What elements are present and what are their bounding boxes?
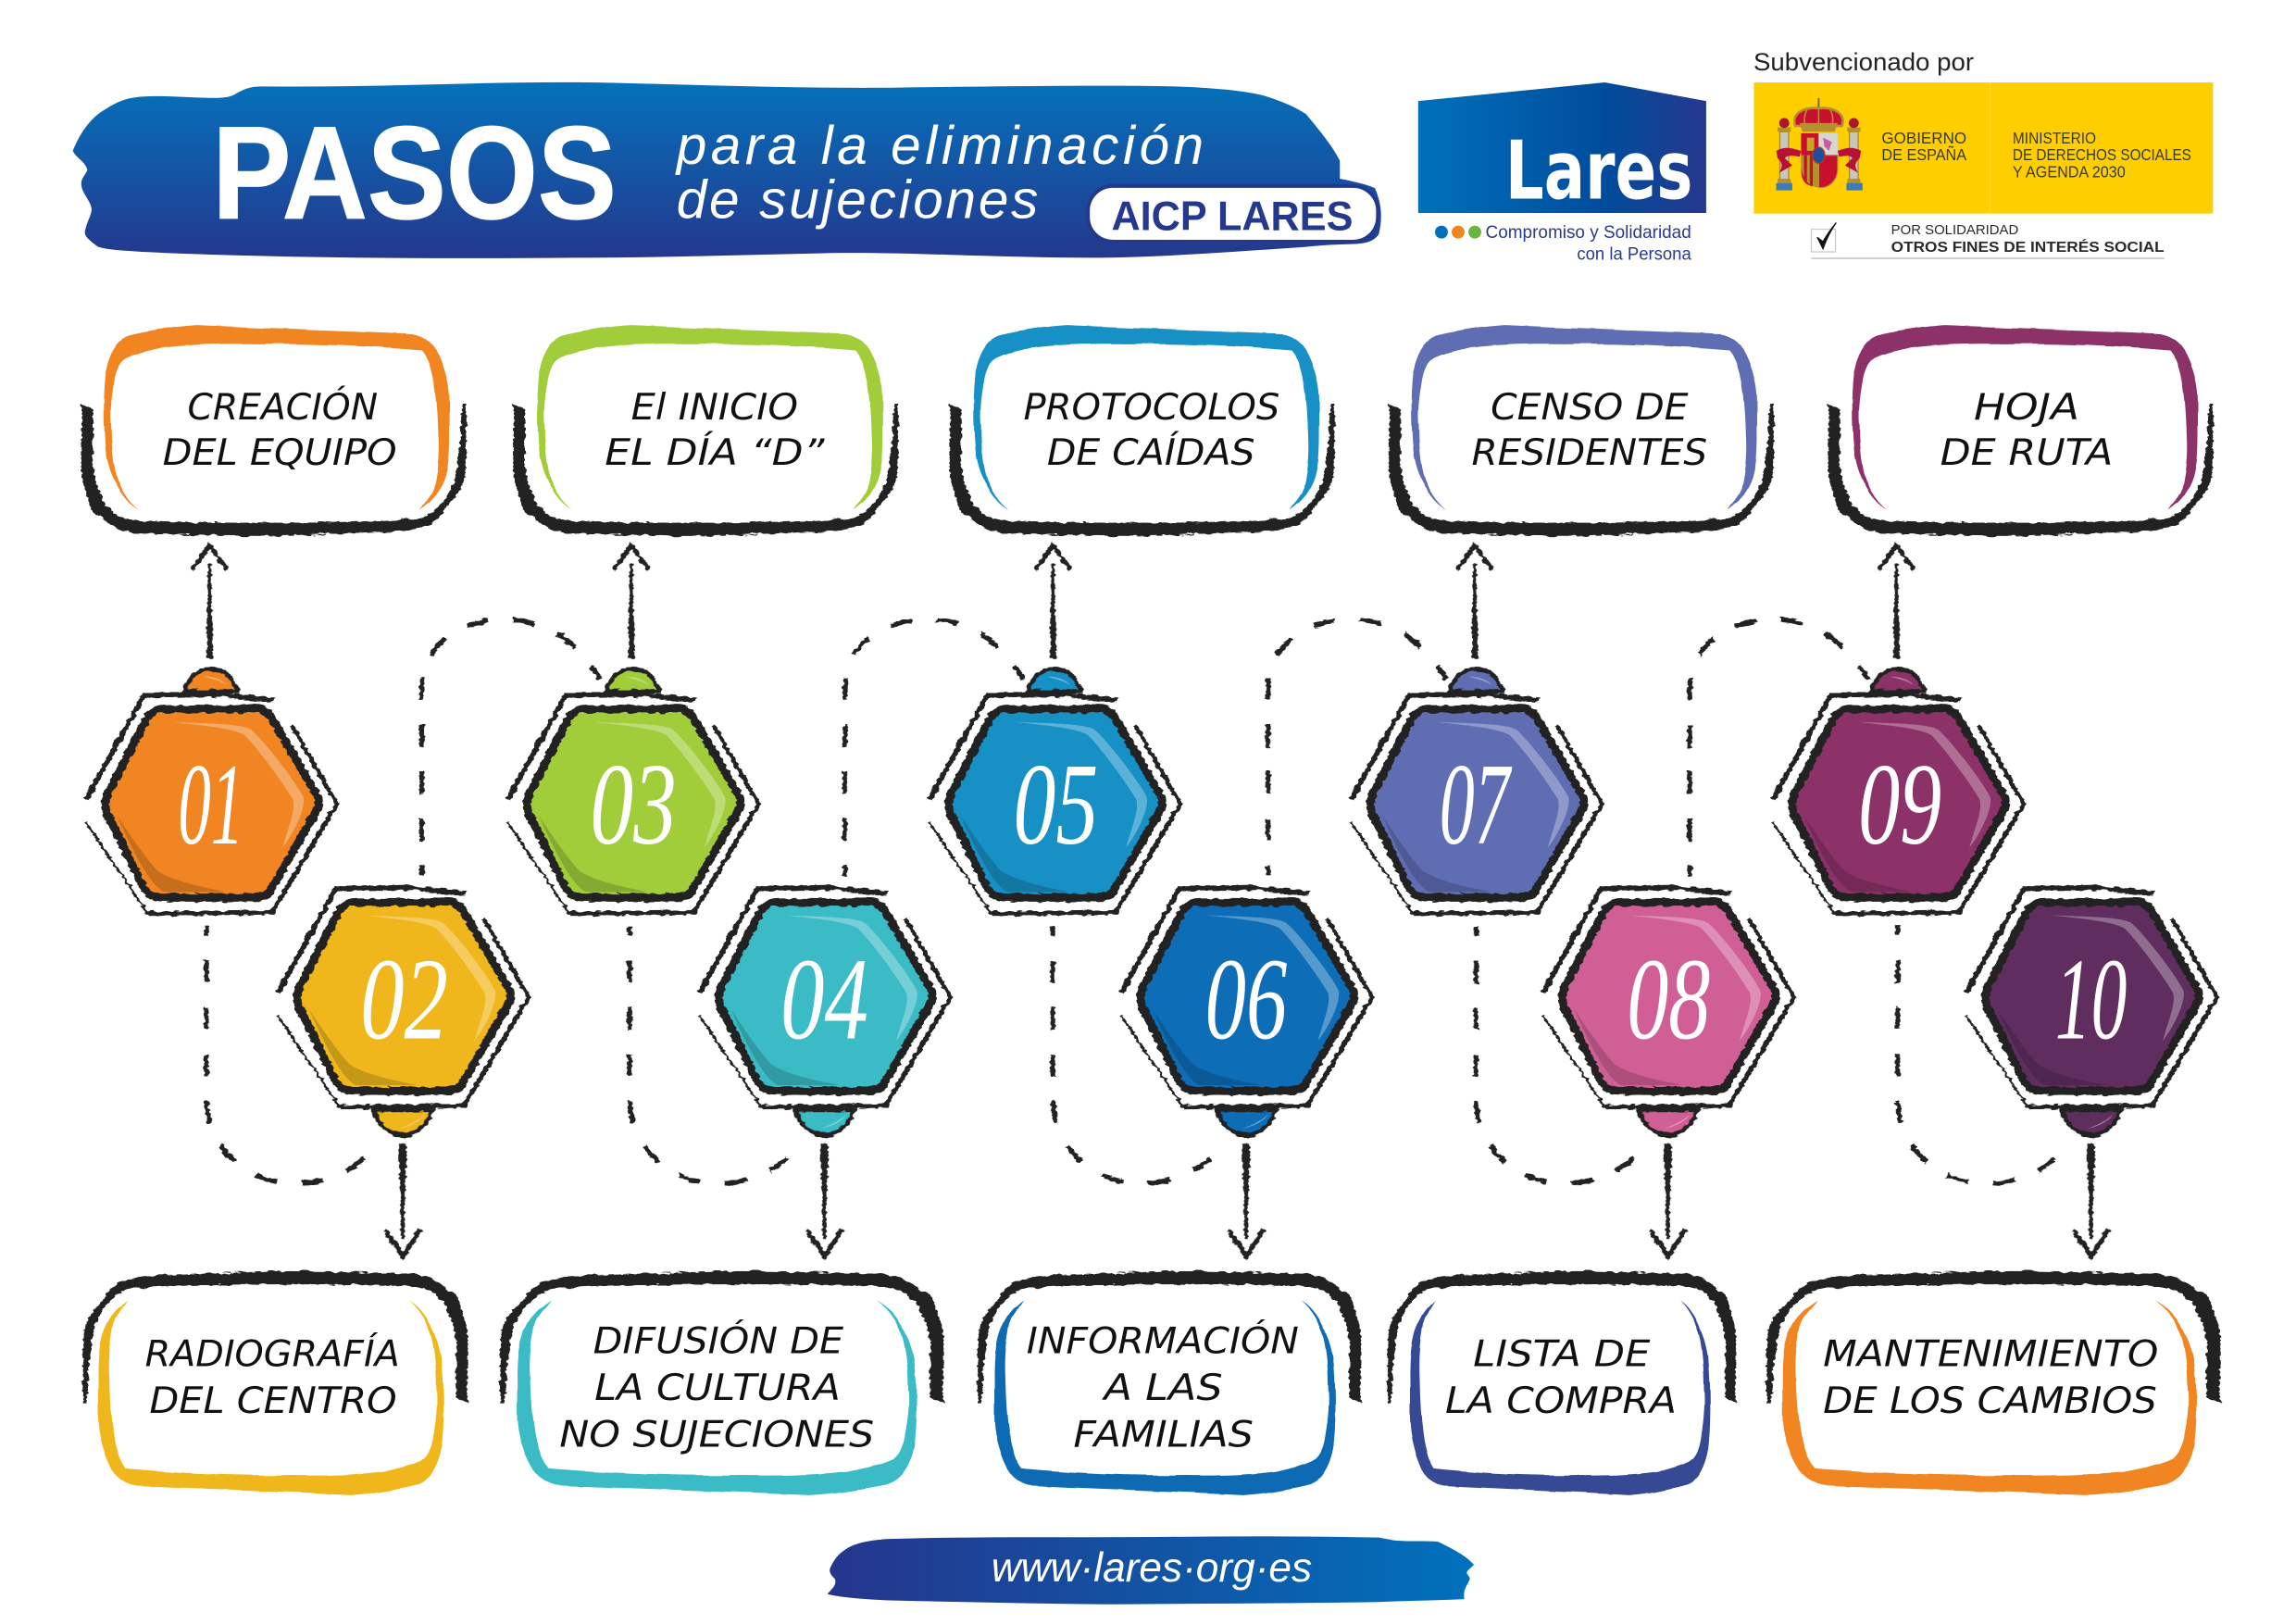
hexagon 07 bbox=[1352, 669, 1602, 914]
government yellow band bbox=[1753, 82, 2213, 214]
hexagon 10: 10 bbox=[2055, 934, 2127, 1064]
arrow up 05 bbox=[1034, 542, 1072, 659]
hexagon 08: 08 bbox=[1627, 934, 1710, 1064]
hexagon 01 bbox=[86, 669, 337, 914]
step box: mantenimiento bbox=[1766, 1271, 2220, 1495]
solidarity text: POR SOLIDARIDAD bbox=[1891, 222, 2018, 238]
subsidy block bbox=[1753, 48, 2213, 258]
ministry text: Y AGENDA 2030 bbox=[2013, 162, 2126, 181]
logo dots bbox=[1435, 226, 1481, 239]
hexagon 03: 03 bbox=[590, 740, 677, 869]
government text: DE ESPAÑA bbox=[1881, 145, 1966, 164]
step box: protocolos bbox=[950, 325, 1334, 536]
hexagon 04 bbox=[700, 887, 950, 1135]
step box: información bbox=[978, 1271, 1361, 1495]
logo tagline: Compromiso y Solidaridad bbox=[1486, 223, 1691, 243]
hexagon 02: 02 bbox=[360, 934, 448, 1064]
hexagon 05: 05 bbox=[1013, 740, 1098, 869]
ministry text: MINISTERIO bbox=[2013, 129, 2096, 147]
step box: información: FAMILIAS bbox=[1073, 1414, 1254, 1456]
brush background bbox=[73, 82, 1381, 258]
solidarity text: OTROS FINES DE INTERÉS SOCIAL bbox=[1891, 238, 2165, 256]
step box: difusión: DIFUSIÓN DE bbox=[593, 1318, 843, 1362]
solidarity text bbox=[1891, 222, 2165, 256]
arrow down 08 bbox=[1649, 1143, 1687, 1261]
step box: lista de la compra: LISTA DE bbox=[1473, 1333, 1651, 1376]
government text bbox=[1881, 129, 1966, 164]
step box: difusión bbox=[500, 1271, 943, 1495]
logo tagline bbox=[1486, 223, 1691, 265]
title PASOS: PASOS bbox=[212, 100, 617, 247]
icon: coat of arms bbox=[1777, 98, 1863, 191]
step box: censo: CENSO DE bbox=[1491, 386, 1689, 429]
hexagon 08 bbox=[1543, 887, 1793, 1135]
step box: creación del equipo bbox=[81, 325, 466, 536]
step box: censo: RESIDENTES bbox=[1472, 431, 1707, 474]
logo house bbox=[1418, 82, 1706, 213]
subsidy heading: Subvencionado por bbox=[1753, 48, 1974, 76]
arrow down 06 bbox=[1227, 1143, 1266, 1261]
ministry text: DE DERECHOS SOCIALES bbox=[2013, 145, 2191, 164]
arrow down 04 bbox=[805, 1143, 843, 1261]
step box: información: A LAS bbox=[1101, 1367, 1223, 1409]
step box: el inicio: El INICIO bbox=[631, 386, 798, 429]
step box: lista de la compra: LA COMPRA bbox=[1445, 1380, 1677, 1422]
step box: difusión: NO SUJECIONES bbox=[559, 1414, 874, 1456]
step box: radiografía: DEL CENTRO bbox=[149, 1380, 397, 1422]
subtitle: para la eliminación bbox=[675, 116, 1204, 176]
hexagon 07: 07 bbox=[1440, 740, 1513, 869]
arrow up 03 bbox=[612, 542, 650, 659]
step box: censo bbox=[1389, 325, 1774, 536]
hexagon 10 bbox=[1966, 887, 2217, 1135]
arrow up 07 bbox=[1455, 542, 1493, 659]
step box: radiografía bbox=[83, 1271, 468, 1495]
step box: creación del equipo: CREACIÓN bbox=[187, 385, 378, 429]
step box: el inicio: EL DÍA “D” bbox=[605, 431, 825, 474]
badge AICP LARES bbox=[1088, 186, 1378, 242]
subtitle bbox=[675, 116, 1204, 231]
logo: Lares bbox=[1418, 82, 1706, 265]
badge AICP LARES: AICP LARES bbox=[1111, 194, 1353, 239]
hexagon 02 bbox=[279, 887, 529, 1135]
step box: hoja de ruta: HOJA bbox=[1974, 386, 2079, 429]
hexagon 04: 04 bbox=[780, 934, 868, 1064]
hexagon 09 bbox=[1773, 669, 2024, 914]
government text: GOBIERNO bbox=[1881, 129, 1966, 147]
logo tagline: con la Persona bbox=[1577, 245, 1691, 265]
step box: radiografía: RADIOGRAFÍA bbox=[145, 1332, 400, 1376]
arrow down 02 bbox=[383, 1143, 422, 1261]
hexagon 03 bbox=[508, 669, 758, 914]
step box: información: INFORMACIÓN bbox=[1027, 1318, 1299, 1362]
step box: mantenimiento: DE LOS CAMBIOS bbox=[1823, 1380, 2157, 1422]
step box: lista de la compra bbox=[1388, 1271, 1736, 1495]
hexagon 09: 09 bbox=[1858, 740, 1941, 869]
step box: creación del equipo: DEL EQUIPO bbox=[163, 431, 397, 474]
arrow up 01 bbox=[191, 542, 229, 659]
icon: tick box bbox=[1811, 222, 1836, 252]
hexagon 05 bbox=[930, 669, 1180, 914]
header banner bbox=[73, 82, 1381, 258]
step box: difusión: LA CULTURA bbox=[594, 1367, 841, 1409]
ministry text bbox=[2013, 129, 2191, 181]
step box: protocolos: PROTOCOLOS bbox=[1024, 386, 1279, 429]
website url: www·lares·org·es bbox=[992, 1545, 1312, 1591]
dashed connectors bbox=[206, 619, 2065, 1183]
arrow up 09 bbox=[1878, 542, 1915, 659]
arrow down 10 bbox=[2072, 1143, 2110, 1261]
step box: el inicio bbox=[514, 325, 898, 536]
hexagon 01: 01 bbox=[178, 740, 243, 869]
hexagon 06: 06 bbox=[1205, 934, 1287, 1064]
logo wordmark: Lares bbox=[1505, 123, 1692, 218]
step box: protocolos: DE CAÍDAS bbox=[1047, 431, 1254, 474]
footer website banner bbox=[828, 1536, 1474, 1605]
step box: hoja de ruta bbox=[1828, 325, 2213, 536]
hexagon 06 bbox=[1122, 887, 1372, 1135]
step box: hoja de ruta: DE RUTA bbox=[1940, 431, 2113, 474]
step box: mantenimiento: MANTENIMIENTO bbox=[1823, 1333, 2158, 1376]
subtitle: de sujeciones bbox=[677, 170, 1038, 231]
